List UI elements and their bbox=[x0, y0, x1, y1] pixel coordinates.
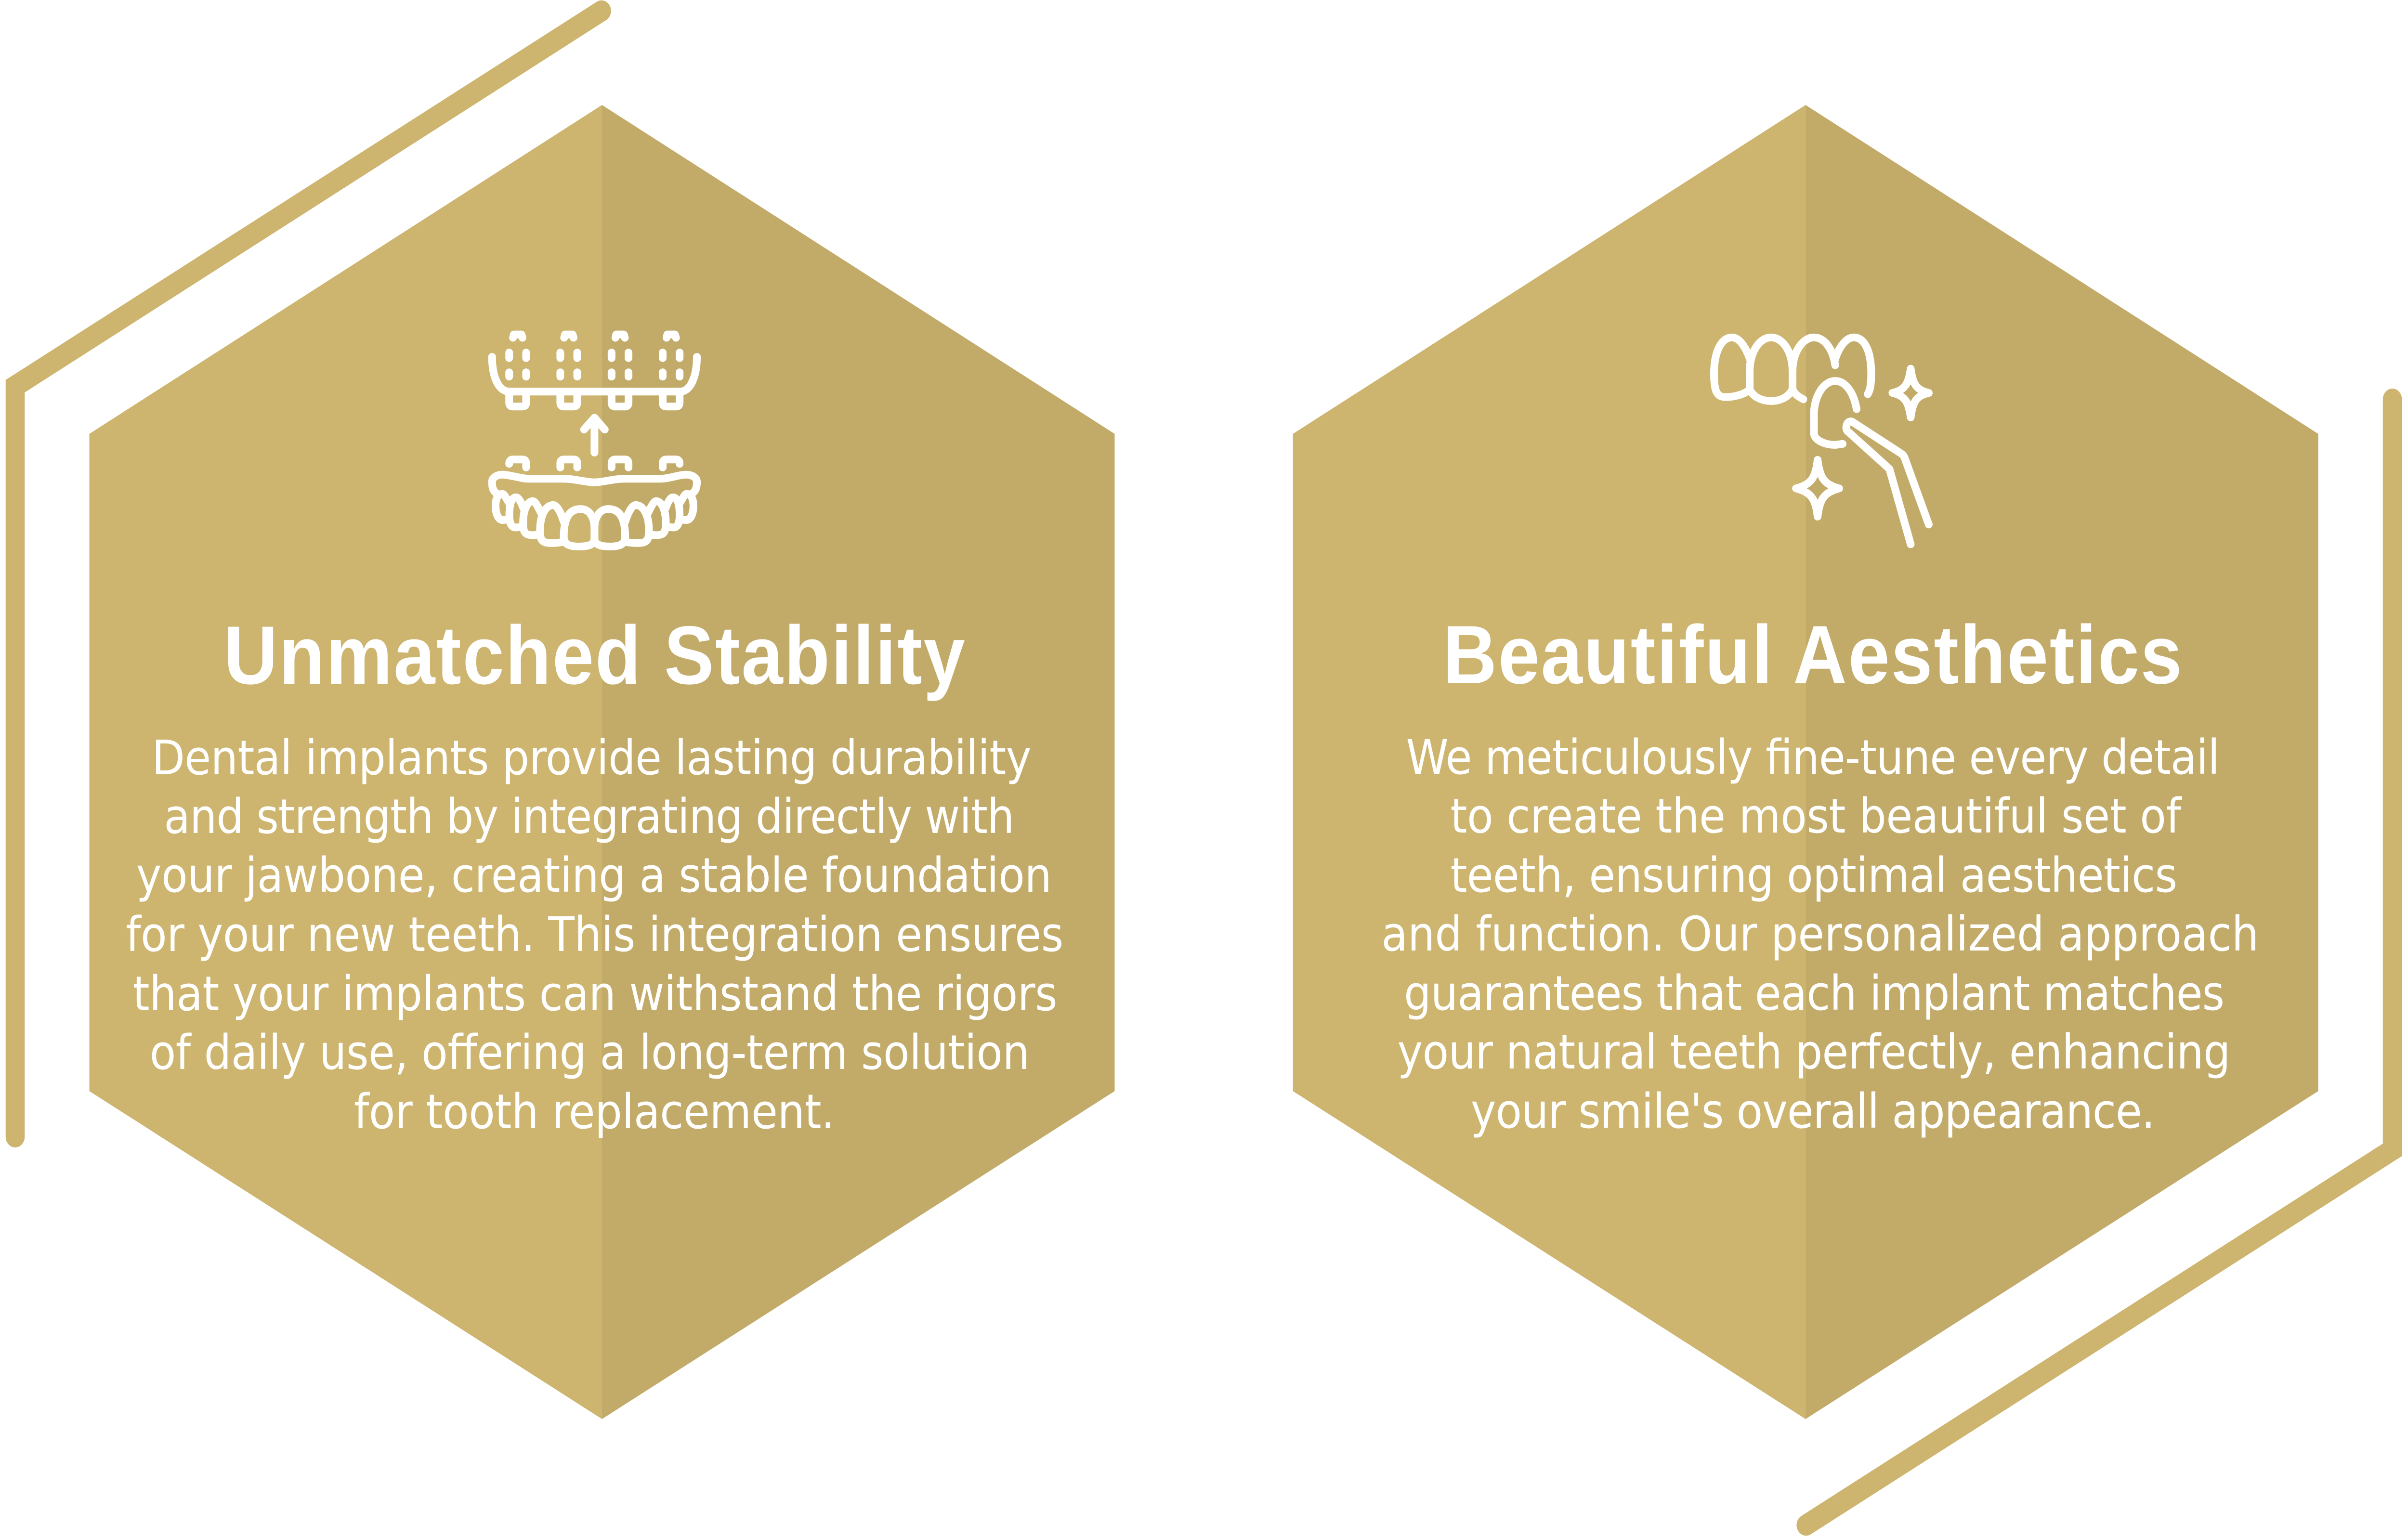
body text: aesthetics: your natural teeth perfectly, enhancing bbox=[1398, 1025, 2231, 1080]
body text: stability: Dental implants provide lasting durability bbox=[152, 731, 1032, 786]
hexagon background: aesthetics bbox=[1293, 105, 2318, 1419]
body text: aesthetics: teeth, ensuring optimal aesthetics bbox=[1451, 848, 2177, 903]
heading: beautiful aesthetics: Beautiful Aesthetics bbox=[1443, 608, 2182, 701]
panel: unmatched stability bbox=[90, 105, 1114, 1419]
heading: unmatched stability: Unmatched Stability bbox=[224, 609, 965, 702]
body text: stability: your jawbone, creating a stable foundation bbox=[136, 848, 1052, 903]
body text: aesthetics: and function. Our personalized approach bbox=[1381, 907, 2259, 962]
hexagon background: stability bbox=[90, 105, 1114, 1419]
icon: veneer held by tweezers with sparkles bbox=[1714, 338, 1929, 544]
body text: aesthetics bbox=[1381, 730, 2259, 1139]
decorative bracket line: bottom right bbox=[1796, 389, 2402, 1536]
body text: aesthetics: to create the most beautiful set of bbox=[1451, 789, 2182, 844]
body text: aesthetics: We meticulously fine-tune every detail bbox=[1406, 730, 2220, 785]
body text: stability: of daily use, offering a long-term solution bbox=[150, 1026, 1030, 1081]
body text: stability: for tooth replacement. bbox=[354, 1085, 835, 1140]
panel: beautiful aesthetics bbox=[1293, 105, 2318, 1419]
body text: stability: that your implants can withstand the rigors bbox=[133, 967, 1058, 1022]
decorative bracket line: top left bbox=[6, 0, 611, 1147]
body text: aesthetics: your smile's overall appearance. bbox=[1471, 1084, 2155, 1139]
body text: stability: and strength by integrating directly with bbox=[164, 790, 1014, 845]
icon: implant denture with arrow bbox=[492, 335, 697, 547]
body text: aesthetics: guarantees that each implant matches bbox=[1404, 966, 2225, 1021]
body text: stability bbox=[126, 731, 1063, 1140]
body text: stability: for your new teeth. This integration ensures bbox=[126, 908, 1063, 963]
